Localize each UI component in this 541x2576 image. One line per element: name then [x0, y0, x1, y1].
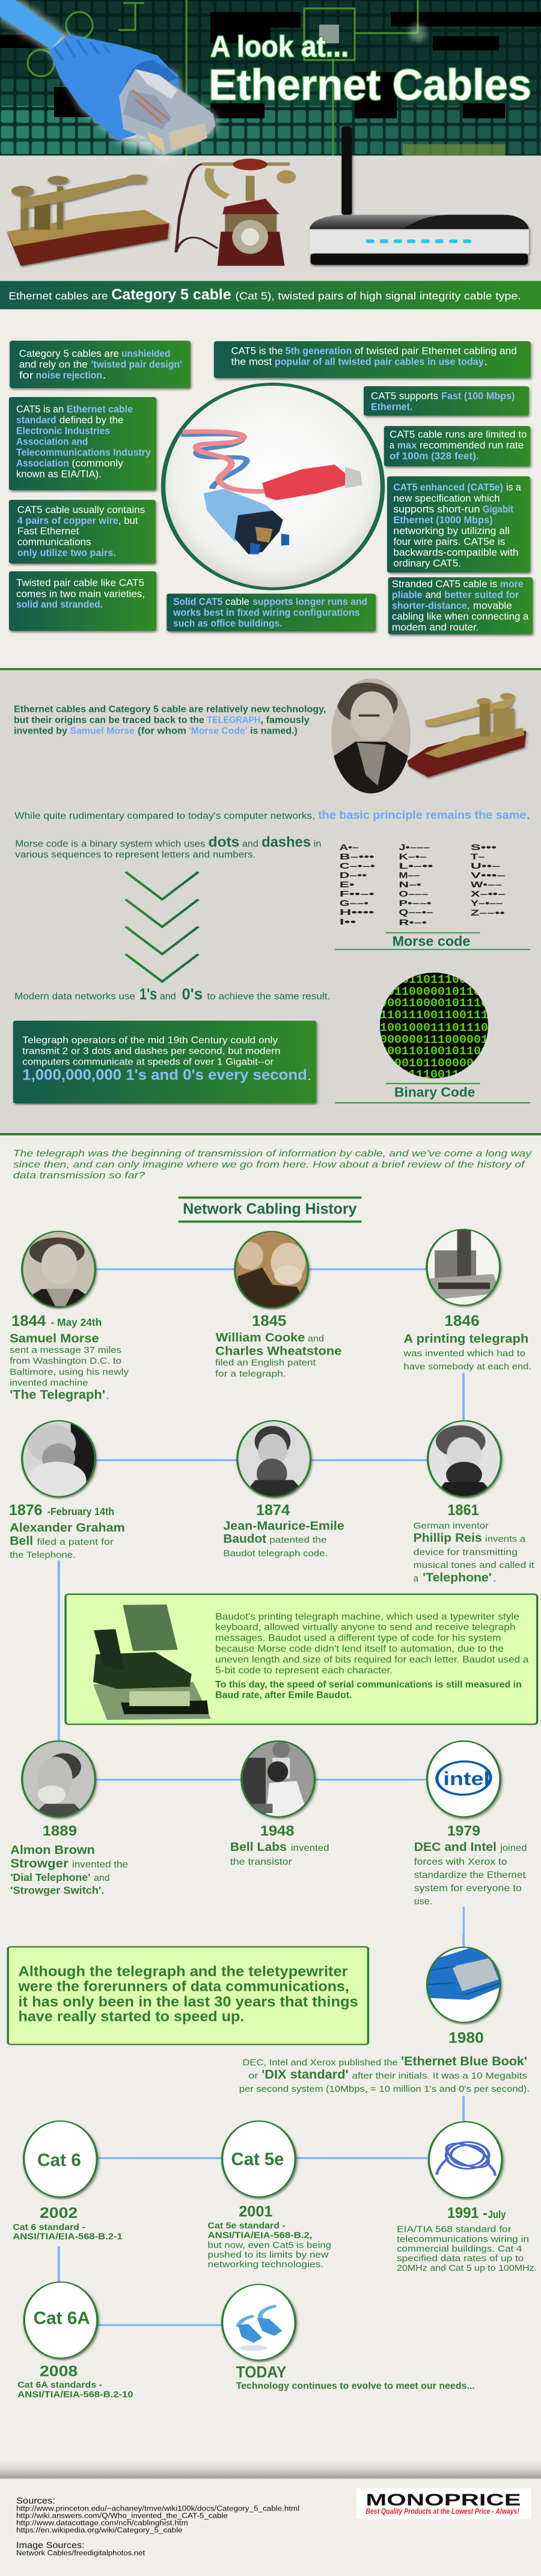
text: 1876 Bell — [9, 1502, 125, 1560]
text: 1948 Bell Labs: Bell Labs — [230, 1839, 287, 1854]
card: unshielded: for — [19, 369, 34, 381]
text: 2002 Cat 6: Cat 6 standard - — [13, 2222, 85, 2232]
text: 1861 Reis — [414, 1502, 534, 1570]
text: 1861 Reis: German inventor — [414, 1521, 489, 1531]
image: binary code oval: 101011100111010 — [380, 1068, 488, 1081]
card: 5th generation: 5th generation — [286, 345, 352, 357]
image: binary code oval: 100010110000011 — [380, 1057, 488, 1070]
text: 2001 Cat 5e: pushed to its limits by new — [208, 2250, 329, 2260]
text: 1948 Bell Labs — [230, 1822, 329, 1867]
text: 1948 Bell Labs: the transistor — [230, 1857, 292, 1867]
badge: Cat 5e — [222, 2121, 295, 2197]
card: standard definition: Electronic Industries — [16, 425, 110, 436]
text: 2008 Cat 6A — [17, 2363, 133, 2399]
badge: Cat 5e: Cat 5e — [231, 2149, 284, 2169]
table: Morse code alphabet: X–••– — [471, 890, 506, 898]
text: 2001 Cat 5e: networking technologies. — [208, 2259, 323, 2270]
table: Morse code alphabet: T– — [471, 852, 484, 861]
text: Telephone word — [414, 1570, 497, 1584]
text: 1889 Strowger: and — [94, 1873, 110, 1883]
callout: forerunners — [8, 1947, 368, 2044]
text: 1846 printing telegraph: 1846 — [444, 1313, 480, 1329]
text: 1979 DEC and Intel: joined — [500, 1843, 527, 1853]
image: binary code oval: 000110000101110 — [380, 997, 488, 1010]
text: 1844 Samuel Morse: invented machine — [10, 1378, 88, 1388]
card: stranded: modem and router. — [392, 622, 479, 633]
image: binary code oval: 101011011100110 — [380, 973, 488, 986]
icon: Intel logo: intel — [444, 1769, 490, 1789]
text: origins: 'Morse Code' — [189, 726, 248, 736]
logo: Monoprice: MONOPRICE — [365, 2491, 521, 2509]
callout: forerunners: have really started to speed up. — [18, 2008, 244, 2025]
banner: category 5 definition: Ethernet cables are — [8, 290, 108, 302]
badge: Cat 6A: Cat 6A — [34, 2307, 90, 2328]
panel: Morse and binary — [14, 678, 530, 1003]
table: Morse code alphabet: J•––– — [399, 843, 430, 852]
text: 1889 Strowger — [10, 1822, 128, 1897]
text: italic introduction: data transmission so far? — [13, 1170, 145, 1180]
table: Morse code alphabet: F••–• — [340, 890, 374, 898]
badge: Cat 6: Cat 6 — [37, 2150, 81, 2170]
text: 1876 Bell: filed a patent for — [37, 1537, 114, 1547]
table: Morse code alphabet: A•– — [340, 843, 359, 852]
table: Morse code alphabet: P•––• — [399, 899, 431, 908]
heading: Network Cabling History — [179, 1197, 362, 1223]
text: sources: https://en.wikipedia.org/wiki/Category_5_cable — [16, 2526, 183, 2534]
text: 2008 Cat 6A: Cat 6A standards - — [17, 2380, 102, 2390]
image: binary code oval: 110111001100111 — [380, 1009, 488, 1022]
text: dots and dashes: various sequences to represent letters and numbers. — [15, 849, 255, 860]
text: 1844 Samuel Morse: - May 24th — [50, 1316, 102, 1329]
text: 2002 Cat 6: 2002 — [40, 2205, 78, 2222]
table: Morse code alphabet: O––– — [399, 890, 428, 898]
card: run limit: max — [397, 440, 417, 451]
text: today — [236, 2363, 475, 2391]
table: Morse code alphabet: H•••• — [340, 908, 374, 917]
text: origins: TELEGRAPH — [207, 715, 260, 725]
text: 1980 Ethernet Blue Book: DEC, Intel and Xerox published the — [243, 2058, 398, 2068]
card: standard definition: Association and — [16, 436, 88, 447]
text: 1876 Bell: the Telephone. — [10, 1551, 76, 1560]
badge: Cat 6 — [24, 2121, 97, 2197]
text: 1874 Baudot: Jean-Maurice-Emile — [223, 1519, 344, 1533]
text: 1991 EIA/TIA 568: 1991 - — [447, 2205, 488, 2222]
portrait: Phillip Reis — [427, 1420, 502, 1499]
footer shadow band — [0, 2457, 541, 2479]
caption: Binary Code: Binary Code — [394, 1084, 475, 1099]
text: basic principle — [14, 809, 530, 822]
table: Morse code alphabet: D–•• — [340, 870, 367, 879]
text: 1844 Samuel Morse: Baltimore, using his newly — [10, 1367, 129, 1377]
text: 1845 Cooke and Wheatstone: Charles Wheatstone — [215, 1344, 341, 1358]
table: Morse code alphabet: C–•–• — [340, 861, 375, 870]
text: 1874 Baudot: Baudot telegraph code. — [223, 1549, 328, 1558]
callout: speed comparison — [13, 1021, 316, 1104]
text: 1980 Ethernet Blue Book: 1980 — [448, 2030, 484, 2046]
table: Morse code alphabet: Q––•– — [399, 908, 433, 917]
text: 1979 DEC and Intel: use. — [414, 1897, 432, 1907]
portrait: Alexander Graham Bell — [22, 1420, 99, 1501]
text: sources: http://www.princeton.edu/~achaney/tmve/wiki100k/docs/Category_5_cable.html — [16, 2505, 299, 2512]
text: 1889 Strowger: 'Strowger Switch'. — [10, 1885, 104, 1897]
callout: speed comparison: . — [307, 1071, 312, 1082]
text: basic principle: . — [526, 811, 530, 821]
text: 2008 Cat 6A: ANSI/TIA/EIA-568-B.2-10 — [17, 2390, 133, 2399]
text: Telephone word: . — [493, 1573, 497, 1584]
text: 2008 Cat 6A: 2008 — [40, 2363, 78, 2380]
callout: Baudot printing telegraph: Baud rate, after Emile Baudot. — [215, 1690, 352, 1701]
text: 1874 Baudot: Baudot — [223, 1532, 266, 1546]
title: A look at... — [210, 31, 349, 63]
text: origins: (for whom — [138, 726, 186, 736]
portrait: Morse — [20, 1231, 97, 1310]
card: stranded: more — [500, 579, 524, 590]
card: standard definition: Association — [16, 458, 69, 469]
text: sources: Sources: — [16, 2496, 55, 2506]
text: 1846 printing telegraph — [403, 1313, 531, 1372]
text: Telephone word: a — [414, 1573, 419, 1584]
card: run limit: a — [390, 440, 394, 451]
portrait: Strowger — [22, 1740, 96, 1818]
table: Morse code alphabet: R•–• — [399, 918, 427, 927]
text: 2002 Cat 6: ANSI/TIA/EIA-568-B.2-1 — [13, 2232, 123, 2241]
card: CAT5 enhanced — [387, 476, 530, 573]
text: ones and zeros — [14, 986, 330, 1003]
card: unshielded: . — [102, 369, 106, 381]
text: 1845 Cooke and Wheatstone: and — [308, 1334, 324, 1344]
text: 1979 DEC and Intel — [414, 1822, 527, 1907]
card: standard definition: CAT5 is an — [16, 404, 64, 415]
image: printing telegraph — [426, 1229, 501, 1305]
title: Ethernet Cables — [209, 61, 531, 109]
text: sources: Network Cables/freedigitalphotos.net — [16, 2549, 145, 2557]
image: binary code oval: 100100011101110 — [380, 1021, 488, 1034]
timeline: 1980 to 1991 — [8, 1934, 537, 2273]
card: standard definition: defined by the — [60, 415, 123, 425]
card: solid: supports longer runs and — [252, 596, 367, 607]
image: cable coil 1991 — [429, 2122, 502, 2198]
photo: red and blue cables — [163, 384, 383, 589]
card: two varieties: Twisted pair cable like CAT5 — [16, 577, 144, 588]
heading: Network Cabling History: Network Cabling History — [183, 1201, 357, 1217]
table: Morse code alphabet: Z––•• — [471, 908, 505, 917]
card: stranded: movable — [473, 600, 512, 612]
text: 1979 DEC and Intel: DEC and Intel — [414, 1839, 497, 1854]
card: copper pairs: , but — [118, 515, 138, 526]
table: Morse code alphabet: W•–– — [471, 880, 502, 889]
text: dots and dashes: dots — [209, 834, 239, 850]
text: 1844 Samuel Morse: sent a message 37 miles — [10, 1345, 121, 1355]
card: stranded: and — [426, 589, 441, 601]
connector lines — [58, 1572, 465, 1937]
text: origins: invented by — [14, 726, 67, 736]
table: Morse code alphabet: Y–•–– — [471, 899, 503, 908]
text: dots and dashes: Morse code is a binary system which uses — [15, 839, 206, 849]
table: Morse code alphabet: G––• — [340, 899, 368, 908]
text: origins: is named.) — [250, 726, 298, 736]
table: Morse code alphabet: S••• — [471, 843, 497, 852]
table: Morse code alphabet: I•• — [340, 917, 356, 926]
text: 1980 Ethernet Blue Book: 'DIX standard' — [261, 2067, 349, 2082]
text: origins — [14, 704, 326, 736]
card: two varieties: solid and stranded. — [16, 599, 103, 610]
text: 1876 Bell: Bell — [10, 1534, 33, 1548]
card: 5th generation: CAT5 is the — [231, 345, 283, 357]
panel: CAT5 facts — [9, 341, 533, 634]
card: solid: works best in fixed wiring configurations — [173, 607, 360, 618]
card: stranded — [388, 577, 533, 634]
card: fast ethernet: CAT5 supports — [371, 390, 438, 402]
text: 1991 EIA/TIA 568: July — [488, 2208, 506, 2221]
text: 1845 Cooke and Wheatstone: William Cooke — [216, 1330, 305, 1344]
card: standard definition: Ethernet cable — [67, 404, 133, 415]
image: binary code oval: 001100000101101 — [380, 985, 488, 998]
icon: Intel logo — [427, 1741, 500, 1817]
photo: Bell Labs — [241, 1740, 316, 1818]
text: 1844 Samuel Morse: 'The Telegraph' — [10, 1388, 105, 1402]
card: stranded: pliable — [392, 589, 423, 601]
card: copper pairs: CAT5 cable usually contains — [17, 504, 145, 515]
card: unshielded: unshielded — [121, 348, 171, 359]
portrait: Samuel Morse — [331, 678, 411, 797]
table: Morse code alphabet: U••– — [471, 861, 500, 870]
text: 1948 Bell Labs: invented — [291, 1843, 329, 1853]
text: dots and dashes — [15, 834, 321, 860]
header banner — [0, 0, 541, 156]
text: 1861 Reis: 1861 — [447, 1502, 479, 1519]
text: italic introduction — [13, 1148, 532, 1180]
text: dots and dashes: in — [314, 839, 321, 849]
logo: Monoprice — [356, 2488, 531, 2520]
connector lines — [58, 1934, 465, 2272]
caption: Morse code: Morse code — [393, 934, 470, 949]
text: 1861 Reis: Phillip Reis — [414, 1531, 482, 1545]
text: sources: http://www.datacottage.com/nch/cablinghist.htm — [16, 2519, 188, 2527]
callout: Baudot printing telegraph — [66, 1594, 537, 1724]
card: standard definition: known as EIA/TIA). — [16, 469, 102, 479]
text: dots and dashes: and — [242, 839, 258, 849]
icon: wireless router — [310, 126, 529, 265]
text: 2001 Cat 5e: ANSI/TIA/EIA-568-B.2, — [208, 2231, 312, 2240]
card: run limit — [384, 426, 530, 466]
callout: speed comparison: transmit 2 or 3 dots and dashes per second, but modern — [22, 1045, 281, 1056]
text: 1980 Ethernet Blue Book: or — [248, 2071, 258, 2081]
text: 1991 EIA/TIA 568 — [397, 2205, 537, 2273]
text: 1979 DEC and Intel: forces with Xerox to — [414, 1857, 507, 1867]
image: Baudot machine engraving — [93, 1605, 211, 1720]
text: sources: Image Sources: — [16, 2541, 85, 2550]
card: copper pairs: communications — [17, 536, 91, 548]
banner: category 5 definition — [0, 281, 541, 309]
table: Morse code alphabet: B–••• — [340, 852, 374, 861]
card: CAT5 enhanced: ordinary CAT5. — [393, 557, 461, 569]
text: 1876 Bell: Alexander Graham — [10, 1520, 125, 1534]
text: origins: but their origins can be traced back to the — [14, 715, 204, 725]
card: unshielded: noise rejection — [36, 369, 102, 381]
card: solid: such as office buildings. — [173, 618, 283, 629]
card: unshielded: 'twisted pair design' — [91, 359, 182, 370]
card: stranded: shorter-distance, — [392, 600, 469, 612]
text: 1845 Cooke and Wheatstone: filed an English patent — [215, 1358, 316, 1368]
text: 2001 Cat 5e — [208, 2204, 331, 2270]
text: 1844 Samuel Morse: 1844 — [11, 1313, 46, 1329]
badge: Cat 6A — [24, 2282, 97, 2358]
image: binary code oval — [379, 972, 489, 1081]
text: 1979 DEC and Intel: 1979 — [447, 1822, 480, 1839]
card: solid: cable — [225, 596, 249, 607]
card: 5th generation: . — [484, 356, 488, 368]
card: unshielded: Category 5 cables are — [19, 348, 119, 359]
text: Telephone word: 'Telephone' — [423, 1570, 492, 1584]
text: today: TODAY — [236, 2363, 286, 2381]
text: 1844 Samuel Morse: . — [106, 1391, 109, 1401]
card: copper pairs: Fast Ethernet — [17, 526, 79, 537]
card: copper pairs: 4 pairs of copper wire — [17, 515, 118, 526]
text: origins: , famously — [260, 715, 310, 725]
text: 1844 Samuel Morse: from Washington D.C. to — [10, 1356, 121, 1366]
table: Morse code alphabet: N–• — [399, 880, 421, 889]
text: ones and zeros: 0's — [182, 986, 203, 1003]
image: patch cable 1980 — [424, 1946, 504, 2023]
text: 1845 Cooke and Wheatstone — [215, 1313, 341, 1379]
text: ones and zeros: 1's — [139, 986, 157, 1003]
card: standard definition: Telecommunications Industry — [16, 447, 151, 458]
card: two varieties — [9, 571, 156, 631]
text: 1874 Baudot: patented the — [269, 1536, 327, 1545]
table: Morse code alphabet: V•••– — [471, 870, 506, 879]
text: 1876 Bell: 1876 — [9, 1502, 43, 1519]
card: solid: Solid CAT5 — [173, 596, 222, 607]
panel: telegraph background — [0, 668, 541, 1135]
text: ones and zeros: Modern data networks use — [14, 991, 135, 1001]
title — [209, 31, 531, 109]
text: 1889 Strowger: Almon Brown — [10, 1842, 95, 1857]
card: CAT5 enhanced: Gigabit — [483, 503, 513, 515]
timeline: 1844 to 1861 — [9, 1229, 534, 1575]
table: Morse code alphabet: E• — [340, 880, 354, 889]
text: 1845 Cooke and Wheatstone: 1845 — [252, 1313, 286, 1329]
card: copper pairs — [9, 500, 156, 564]
text: 2001 Cat 5e: 2001 — [239, 2204, 272, 2220]
text: sources: http://wiki.answers.com/Q/Who_invented_the_CAT-5_cable — [16, 2512, 228, 2520]
text: 2001 Cat 5e: but now, even Cat5 is being — [208, 2240, 331, 2250]
icon: brass telegraph key — [407, 693, 526, 777]
text: 1861 Reis: invents a — [485, 1534, 525, 1544]
card: copper pairs: only utilize two pairs. — [17, 547, 116, 559]
text: ones and zeros: to achieve the same result. — [207, 991, 330, 1001]
table: Morse code alphabet — [340, 843, 506, 927]
timeline: Baudot callout to 1979 — [10, 1570, 537, 1937]
card: standard definition — [9, 397, 156, 490]
text: ones and zeros: and — [160, 991, 176, 1001]
text: 2002 Cat 6 — [13, 2205, 123, 2241]
callout: speed comparison: 1,000,000,000 1's and 0's every second — [22, 1066, 307, 1083]
image: binary code oval: 000000111000001 — [380, 1033, 488, 1046]
panel: device band — [0, 156, 541, 281]
text: 1874 Baudot — [223, 1502, 344, 1558]
connector lines — [58, 2271, 222, 2326]
image: binary code oval: 000110100101101 — [380, 1045, 488, 1058]
text: 1844 Samuel Morse — [10, 1313, 129, 1402]
text: 1889 Strowger: invented the — [72, 1859, 128, 1870]
text: sources — [16, 2496, 299, 2557]
text: 1948 Bell Labs: 1948 — [260, 1822, 295, 1839]
image: two blue connectors — [222, 2285, 295, 2360]
card: CAT5 enhanced: supports short-run — [393, 503, 480, 515]
icon: telegraph key — [7, 174, 169, 266]
card: run limit: of 100m (328 feet). — [390, 451, 479, 462]
table: Morse code alphabet: M–– — [399, 870, 420, 879]
text: 2001 Cat 5e: Cat 5e standard - — [208, 2221, 286, 2231]
card: unshielded — [10, 341, 191, 388]
icon: ethernet plug — [0, 0, 216, 157]
icon: chevron arrows — [126, 872, 198, 982]
panel: history intro — [13, 1021, 532, 1223]
callout: forerunners: it has only been in the last 30 years that things — [18, 1993, 358, 2009]
text: basic principle: While quite rudimentary compared to today's computer networks, — [14, 811, 315, 821]
card: two varieties: comes in two main varieties, — [16, 588, 145, 600]
text: 1889 Strowger: 'Dial Telephone' — [10, 1871, 90, 1883]
card: fast ethernet — [364, 386, 529, 416]
portrait: Cooke and Wheatstone — [234, 1232, 311, 1310]
table: Morse code alphabet: L•–•• — [399, 861, 433, 870]
card: 5th generation — [214, 341, 531, 378]
portrait: Baudot — [237, 1420, 311, 1499]
timeline: 2008 to today and footer — [0, 2271, 541, 2557]
text: origins: Ethernet cables and Category 5 cable are relatively new technology, — [14, 704, 326, 714]
callout: forerunners: were the forerunners of data communications, — [18, 1978, 349, 1994]
text: 1845 Cooke and Wheatstone: for a telegraph. — [215, 1369, 286, 1379]
card: unshielded: and rely on the — [19, 359, 88, 370]
callout: forerunners: Although the telegraph and the teletypewriter — [18, 1963, 348, 1979]
callout: speed comparison: computers communicate at speeds of over 1 Gigabit--or — [22, 1056, 274, 1067]
card: fast ethernet: Ethernet. — [371, 401, 412, 413]
text: 1844 Samuel Morse: Samuel Morse — [10, 1331, 99, 1345]
card: standard definition: standard — [16, 415, 57, 425]
text: dots and dashes: dashes — [261, 834, 311, 850]
card: 5th generation: the most — [231, 356, 272, 368]
callout: Baudot printing telegraph: 5-bit code to represent each character. — [215, 1665, 393, 1676]
text: 1980 Ethernet Blue Book — [239, 2030, 530, 2094]
icon: antique telephone — [176, 159, 296, 266]
banner: category 5 definition: Category 5 cable — [111, 287, 231, 303]
card: standard definition: (commonly — [72, 458, 123, 469]
text: 1889 Strowger: Strowger — [10, 1856, 69, 1870]
callout: speed comparison: Telegraph operators of the mid 19th Century could only — [22, 1034, 278, 1045]
text: 1876 Bell: -February 14th — [47, 1505, 114, 1517]
table: Morse code alphabet: K–•– — [399, 852, 427, 861]
text: 1889 Strowger: 1889 — [43, 1822, 77, 1839]
connector lines — [58, 1268, 465, 1575]
card: CAT5 enhanced: is a — [506, 482, 521, 493]
text: 1874 Baudot: 1874 — [256, 1502, 290, 1519]
card: solid — [167, 594, 376, 631]
text: origins: Samuel Morse — [70, 726, 135, 736]
